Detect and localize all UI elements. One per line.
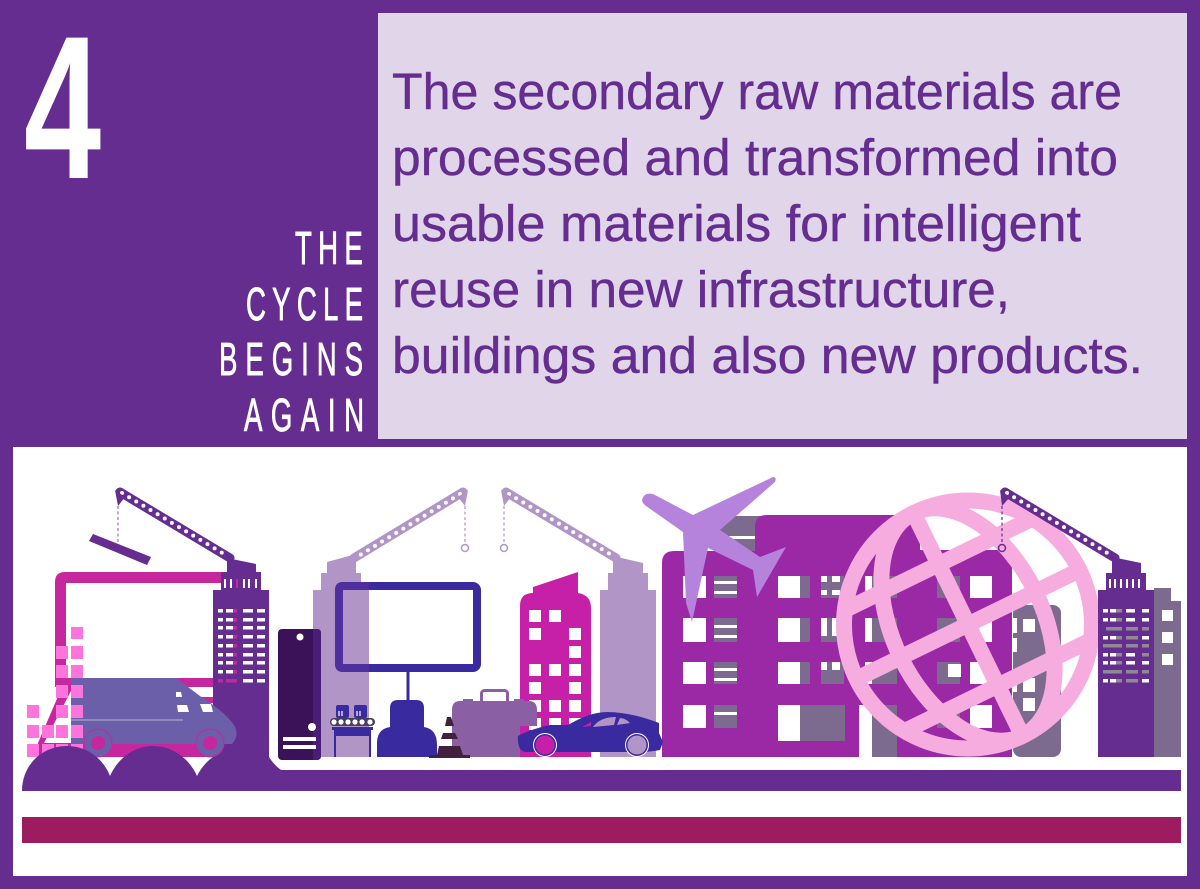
grey building behind right side [720,516,1061,757]
step number: 4 [24,0,101,221]
right crane jib [998,490,1115,558]
suitcase [452,690,537,757]
conveyor table with boxes [330,705,375,757]
panel: illustration [13,447,1187,876]
panel: description: buildings and also new products. [392,327,1143,384]
left crane jib with load [89,490,230,565]
panel: description: reuse in new infrastructure, [392,261,1010,318]
right crane tower [1098,557,1154,757]
heading: the cycle begins again: BEGINS [219,335,363,386]
traffic cone [429,717,470,758]
second light tower and crane [500,490,656,757]
panel: description: usable materials for intelligent [392,195,1081,252]
heading: the cycle begins again: CYCLE [246,280,363,331]
heading: the cycle begins again [219,224,364,442]
delivery van [71,678,237,757]
sports car [518,712,663,757]
computer tower [278,629,321,760]
bottom maroon bar [22,817,1181,843]
heading: the cycle begins again: AGAIN [244,391,364,442]
ground with hills [22,746,1181,791]
panel: description: The secondary raw materials are [392,63,1122,120]
globe [802,458,1134,791]
monitor on stand [335,582,477,757]
right grey building [1154,588,1181,757]
left crane tower [213,558,269,757]
magenta laptop [38,572,227,757]
panel: description [378,13,1187,439]
heading: the cycle begins again: THE [295,224,363,275]
pink squares [27,627,83,757]
light purple tower and crane [313,490,468,757]
airplane [642,477,786,622]
magenta building [520,572,591,757]
panel: description: processed and transformed into [392,129,1118,186]
purple main building [662,515,1035,757]
